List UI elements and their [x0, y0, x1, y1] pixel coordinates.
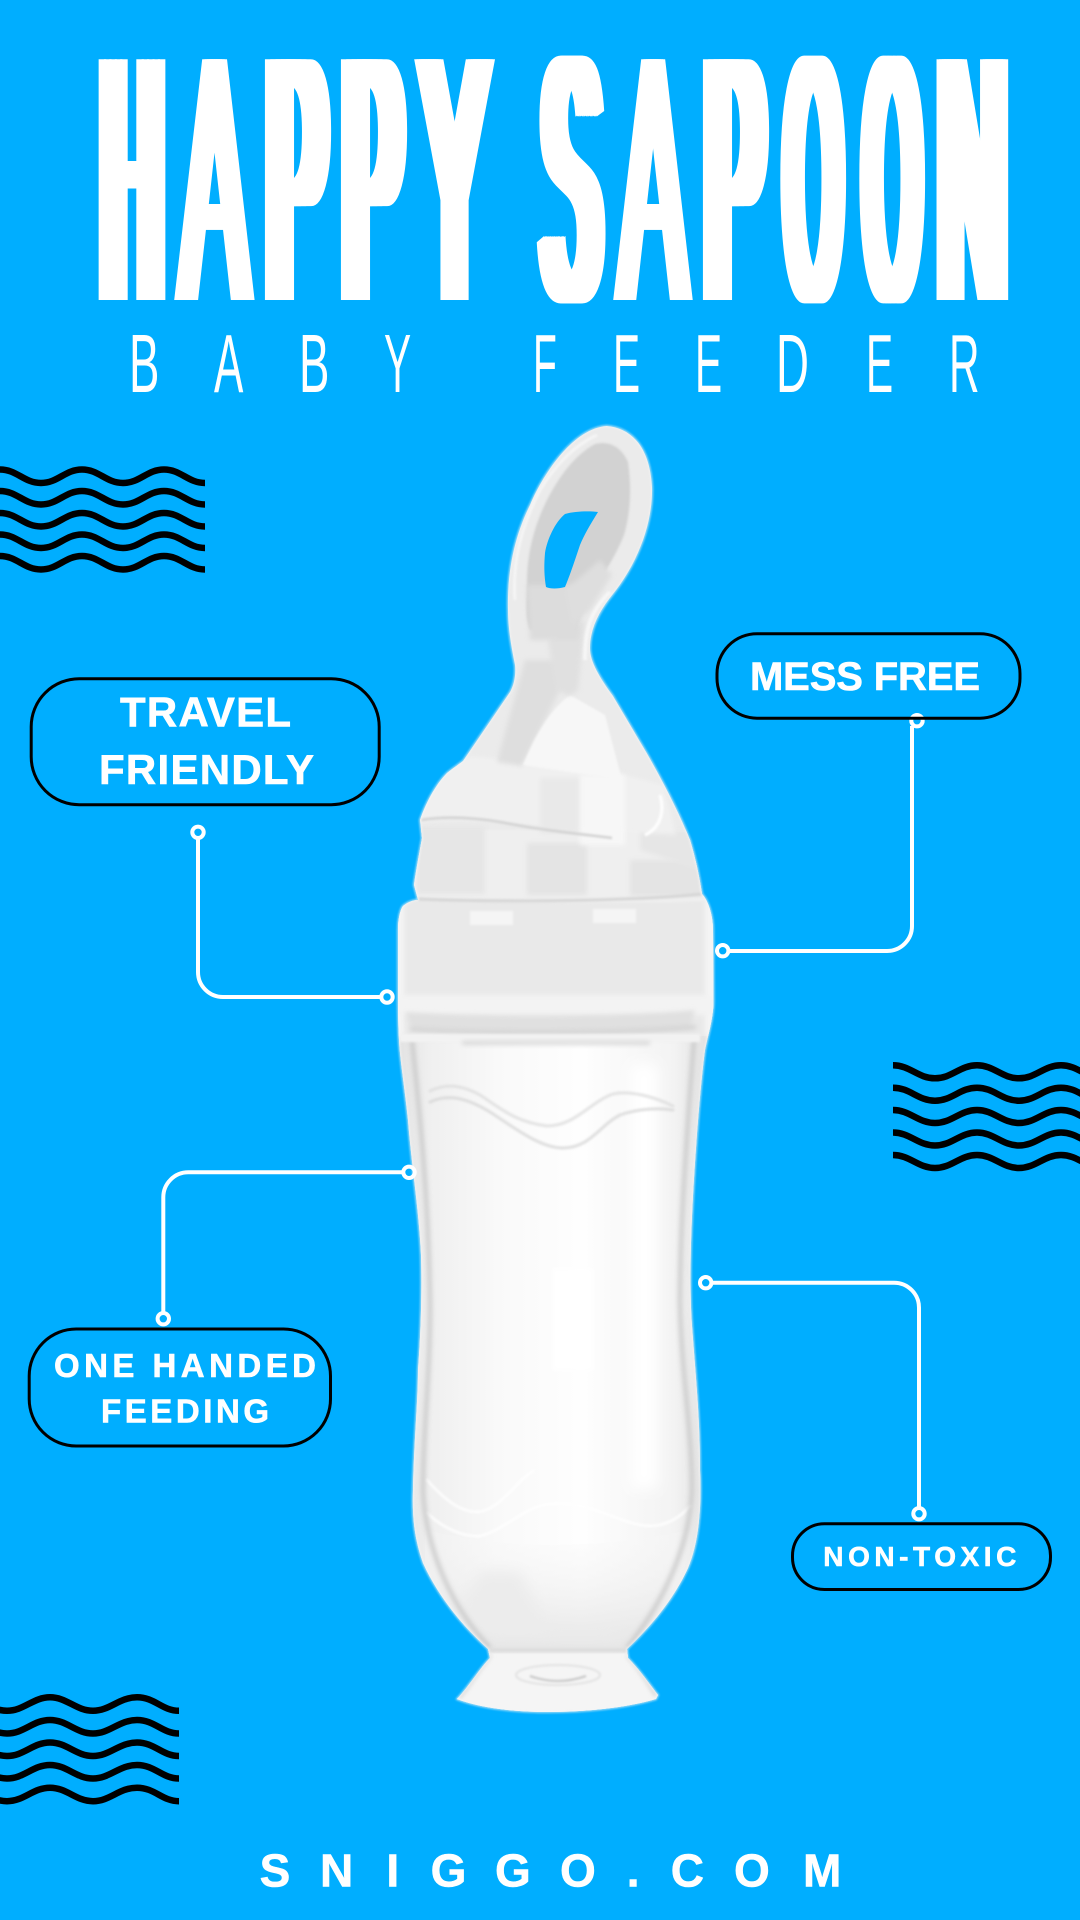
bottle inner walls: [412, 1040, 694, 1648]
callout: one handed feeding: FEEDING: [101, 1392, 269, 1429]
callout: non-toxic: [792, 1524, 1050, 1590]
bottle wave lines: [427, 1086, 690, 1536]
subtitle: [30, 317, 1040, 1591]
illustration: spoon-feeder bottle: [390, 426, 720, 1726]
connector: non-toxic: [700, 1277, 925, 1519]
subtitle: A: [214, 317, 243, 410]
icon: wave lines right: [893, 1065, 1080, 1168]
subtitle: Y: [384, 317, 411, 410]
icon: wave lines top left: [0, 470, 205, 570]
subtitle: E: [613, 317, 640, 410]
subtitle: R: [949, 317, 979, 410]
threaded ring with shaded patches: [414, 826, 707, 901]
callout: travel friendly: FRIENDLY: [99, 746, 314, 793]
subtitle: E: [695, 317, 722, 410]
callout: travel friendly: [31, 679, 379, 805]
subtitle: F: [533, 317, 557, 410]
base suction cup: [457, 1650, 658, 1712]
nipple upper ring: [414, 756, 702, 901]
callout: mess free: [717, 634, 1020, 718]
connector: mess free: [717, 715, 923, 956]
spoon rim and depression: [514, 435, 630, 660]
subtitle: E: [866, 317, 893, 410]
callout: mess free: MESS FREE: [750, 655, 980, 699]
subtitle: B: [129, 317, 159, 410]
connector: travel friendly: [192, 827, 393, 1003]
footer website: SNIGGO.COM: [260, 1845, 841, 1897]
subtitle: D: [776, 317, 809, 410]
callout: one handed feeding: [29, 1329, 330, 1446]
subtitle: B: [299, 317, 329, 410]
bottle body: [390, 1036, 720, 1726]
spoon handle hole: [544, 511, 598, 588]
icon: wave lines bottom left: [0, 1697, 179, 1801]
collar: [390, 900, 720, 1043]
connector: one handed feeding: [158, 1167, 415, 1324]
callout: travel friendly: TRAVEL: [120, 689, 291, 736]
callout: non-toxic: NON-TOXIC: [823, 1541, 1016, 1572]
spoon neck and triangle: [498, 639, 619, 773]
bottle edge highlight: [398, 426, 714, 1712]
callout: one handed feeding: ONE HANDED: [54, 1347, 316, 1384]
title: [34, 0, 1052, 1591]
